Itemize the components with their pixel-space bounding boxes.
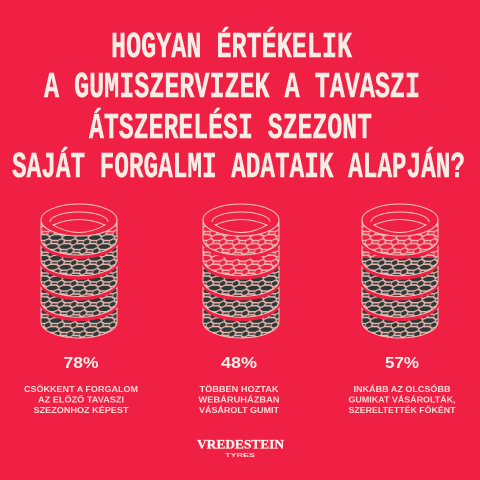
caption: 57%: GUMIKAT VÁSÁROLTÁK, (348, 396, 456, 404)
stat: 57%: 57% (385, 355, 419, 372)
title (12, 26, 465, 188)
logo: Vredestein Tyres: VREDESTEIN (197, 436, 285, 452)
stat: 78%: 78% (64, 355, 99, 372)
caption: 48%: WEBÁRUHÁZBAN (198, 396, 280, 404)
logo: Vredestein Tyres (197, 436, 285, 459)
caption: 57%: SZERELTETTÉK FŐKÉNT (348, 406, 456, 415)
caption: 48%: TÖBBEN HOZTAK (200, 385, 279, 394)
caption: 48%: VÁSÁROLT GUMIT (199, 406, 279, 415)
caption: 78%: CSÖKKENT A FORGALOM (24, 385, 138, 394)
caption: 57% (348, 385, 456, 415)
logo: Vredestein Tyres: TYRES (225, 453, 256, 459)
title: HOGYAN ÉRTÉKELIK (111, 26, 352, 68)
stat: 48%: 48% (221, 355, 257, 372)
caption: 78% (24, 385, 138, 415)
tire stack 2: 48% (203, 204, 279, 338)
caption: 78%: AZ ELŐZŐ TAVASZI (38, 396, 124, 404)
tire stack 3: 57% (362, 204, 438, 338)
caption: 57%: INKÁBB AZ OLCSÓBB (354, 385, 451, 394)
caption: 78%: SZEZONHOZ KÉPEST (34, 406, 129, 415)
tire stack 1: 78% (41, 204, 117, 338)
caption: 48% (198, 385, 280, 415)
